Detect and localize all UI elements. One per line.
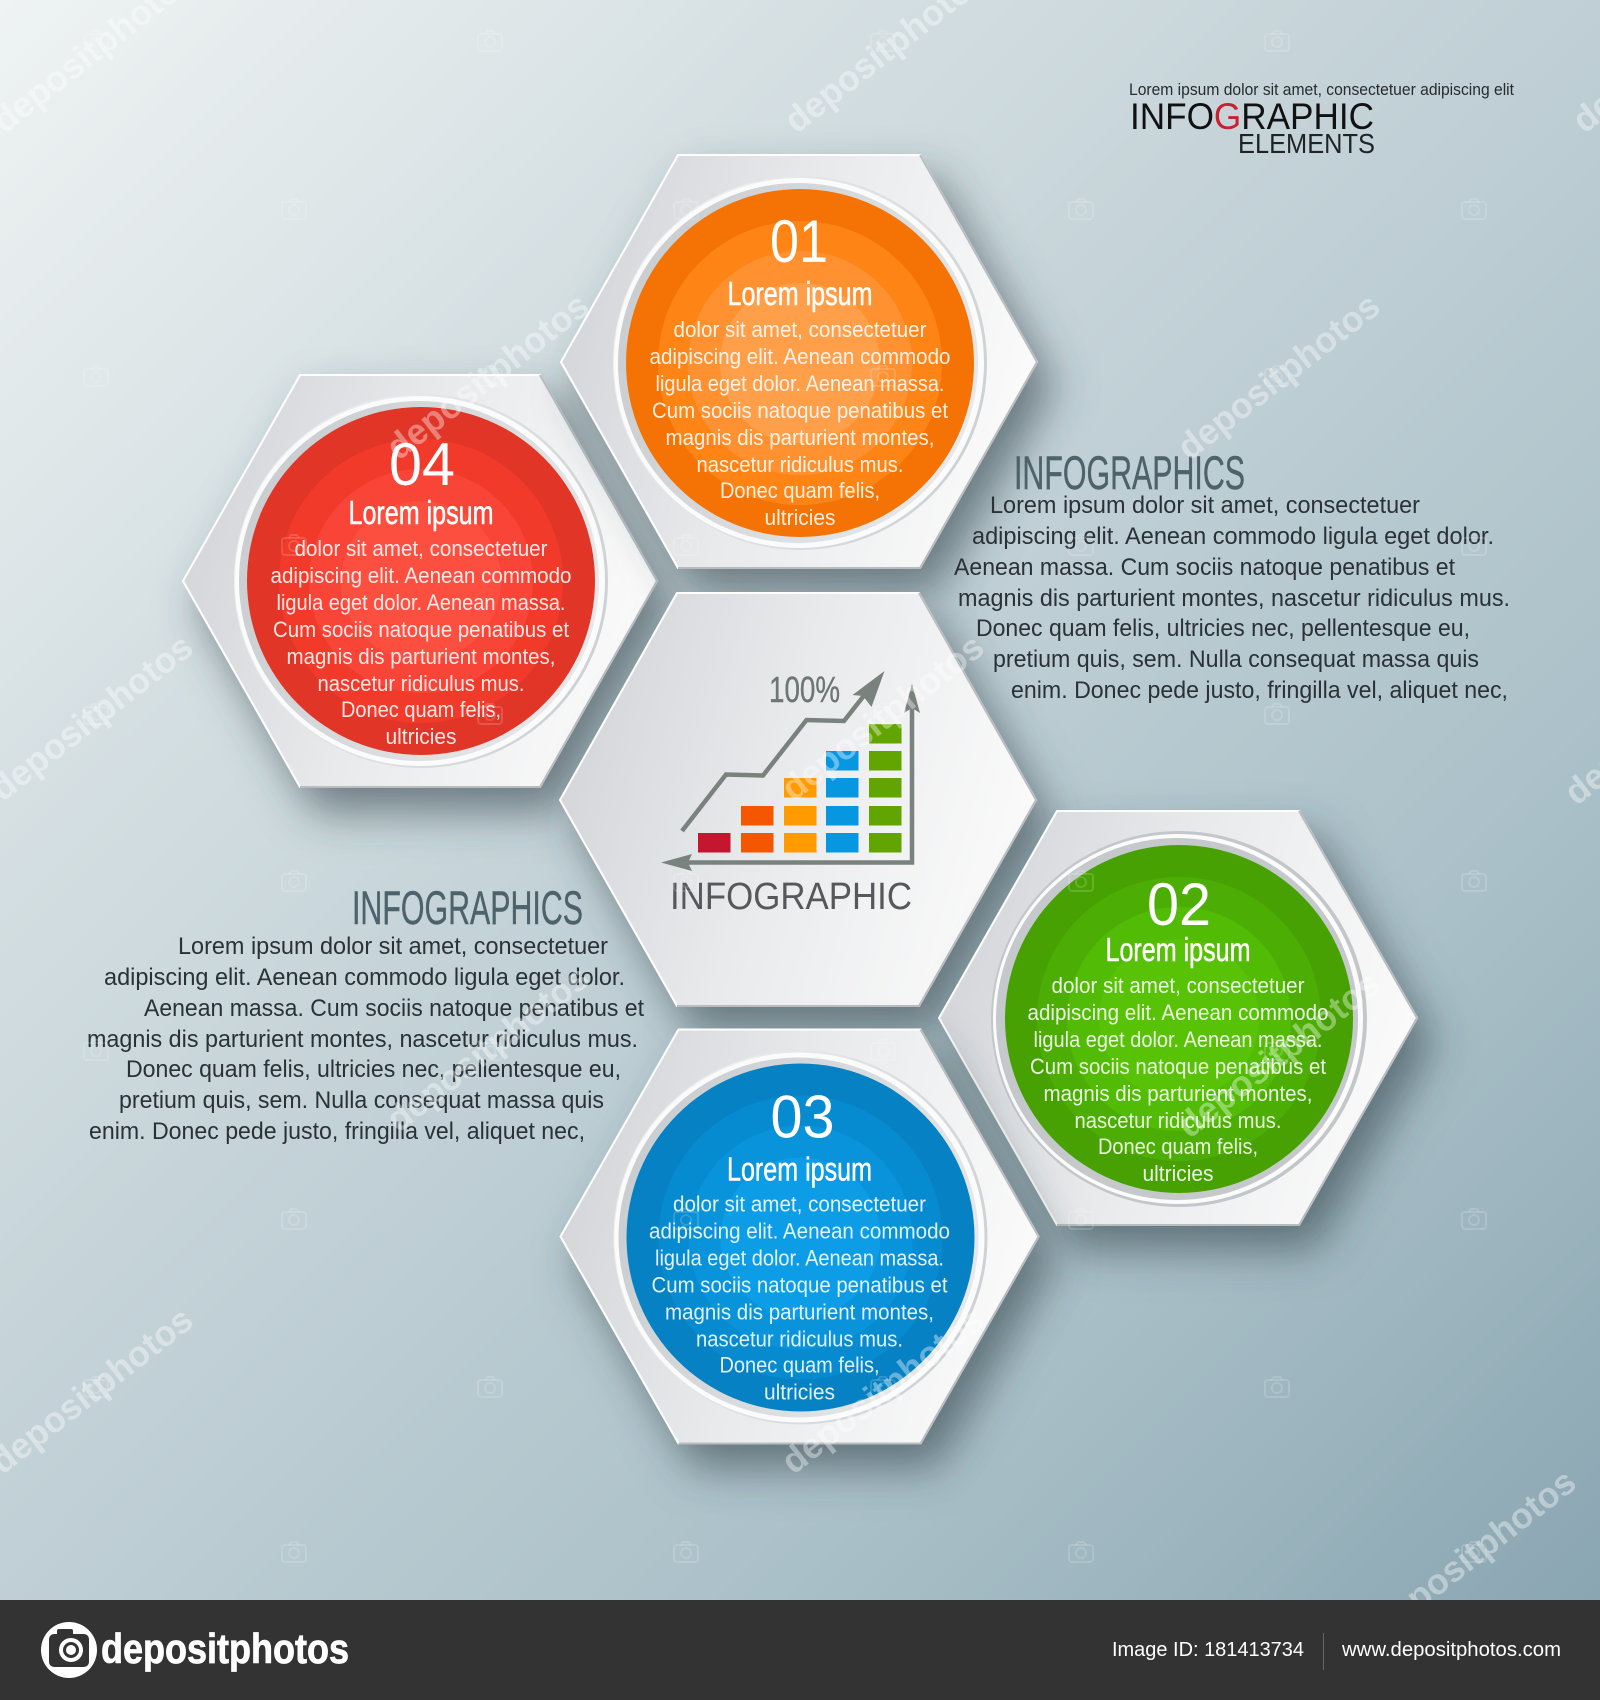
body text: dolor sit amet, consectetuer (294, 536, 548, 561)
body text (649, 1192, 950, 1404)
left paragraph: Lorem ipsum dolor sit amet, consectetuer (178, 933, 608, 960)
body text: Cum sociis natoque penatibus et (652, 1272, 948, 1298)
body text (270, 536, 572, 749)
green disc with concentric rings (1005, 845, 1353, 1193)
watermark: depositphotos text: depositphotos (1169, 963, 1387, 1146)
chart label 100%: 100% (769, 669, 840, 710)
body text: Cum sociis natoque penatibus et (652, 398, 948, 423)
body text: Cum sociis natoque penatibus et (273, 617, 569, 642)
body text: Cum sociis natoque penatibus et (1030, 1054, 1326, 1079)
body text: Donec quam felis, (720, 478, 880, 503)
body text: Donec quam felis, (1098, 1134, 1258, 1159)
left paragraph (87, 933, 644, 1145)
bar column 4 (826, 751, 858, 852)
panel: hexagon 03 blue (560, 1030, 1038, 1444)
watermark: camera icons (84, 31, 1486, 1562)
right paragraph: enim. Donec pede justo, fringilla vel, aliquet nec, (1011, 677, 1508, 704)
right paragraph: magnis dis parturient montes, nascetur ridiculus mus. (958, 585, 1510, 612)
body text (1028, 973, 1328, 1186)
body text: ultricies (764, 505, 836, 530)
left paragraph: Aenean massa. Cum sociis natoque penatibus et (144, 995, 644, 1022)
footer url: www.depositphotos.com (1341, 1639, 1561, 1661)
heading: Lorem ipsum (348, 494, 494, 531)
watermark: depositphotos text: depositphotos (773, 1299, 991, 1482)
panel: hexagon 04 red (183, 375, 657, 787)
orange disc with concentric rings (626, 189, 974, 537)
body text: nascetur ridiculus mus. (1074, 1108, 1282, 1133)
watermark: depositphotos text: depositphotos (378, 957, 596, 1140)
watermark: depositphotos text: depositphotos (1169, 285, 1387, 468)
right paragraph: Aenean massa. Cum sociis natoque penatibus et (954, 554, 1455, 581)
watermark: depositphotos text: depositphotos (1365, 1461, 1583, 1644)
chart axes (661, 684, 920, 871)
watermark: depositphotos text: depositphotos (378, 285, 596, 468)
body text: ligula eget dolor. Aenean massa. (1034, 1027, 1322, 1052)
number 01: 01 (770, 208, 828, 275)
body text: adipiscing elit. Aenean commodo (1028, 1000, 1328, 1025)
icon: growth bar chart (661, 669, 920, 918)
heading: Lorem ipsum (727, 1150, 872, 1188)
heading: Lorem ipsum (1106, 931, 1250, 968)
heading: Lorem ipsum (728, 275, 872, 312)
header title: INFOGRAPHIC (1130, 96, 1374, 137)
body text: Donec quam felis, (720, 1352, 880, 1378)
body text: ligula eget dolor. Aenean massa. (655, 1246, 944, 1270)
bar column 2 (741, 806, 774, 852)
header tagline: Lorem ipsum dolor sit amet, consectetuer adipiscing elit (1129, 80, 1514, 99)
body text: Donec quam felis, (341, 697, 501, 722)
body text: nascetur ridiculus mus. (696, 452, 904, 477)
header subtitle: ELEMENTS (1238, 128, 1375, 159)
body text (650, 317, 950, 530)
footer logo wordmark: depositphotos (101, 1625, 349, 1672)
body text: ligula eget dolor. Aenean massa. (276, 590, 566, 615)
header: infographic elements title (1129, 80, 1514, 159)
bar column 1 (698, 833, 730, 852)
blue disc with concentric rings (626, 1064, 974, 1412)
bar column 5 (869, 724, 902, 852)
panel: hexagon center chart (560, 593, 1036, 1006)
body text: magnis dis parturient montes, (666, 425, 934, 450)
body text: adipiscing elit. Aenean commodo (650, 344, 950, 369)
chart label infographic: INFOGRAPHIC (670, 876, 912, 918)
right paragraph (954, 492, 1510, 704)
body text: ultricies (386, 724, 456, 749)
footer bar (0, 1600, 1600, 1700)
body text: dolor sit amet, consectetuer (673, 1192, 926, 1216)
red disc with concentric rings (247, 407, 595, 755)
body text: dolor sit amet, consectetuer (674, 317, 926, 342)
body text: nascetur ridiculus mus. (318, 671, 524, 696)
panel: hexagon 01 orange (561, 155, 1037, 568)
body text: dolor sit amet, consectetuer (1052, 973, 1304, 998)
text block: right (954, 446, 1510, 704)
body text: adipiscing elit. Aenean commodo (649, 1218, 950, 1244)
right paragraph: pretium quis, sem. Nulla consequat massa quis (993, 646, 1479, 673)
left paragraph: magnis dis parturient montes, nascetur ridiculus mus. (87, 1026, 638, 1053)
number 04: 04 (389, 431, 455, 498)
icon: depositphotos camera logo (41, 1622, 97, 1678)
arrow: trend line (682, 671, 884, 831)
body text: ultricies (764, 1380, 835, 1404)
left paragraph: Donec quam felis, ultricies nec, pellentesque eu, (126, 1056, 621, 1083)
number 02: 02 (1147, 871, 1211, 938)
left paragraph: adipiscing elit. Aenean commodo ligula eget dolor. (104, 964, 625, 991)
bar column 3 (784, 778, 816, 852)
body text: magnis dis parturient montes, (286, 644, 556, 669)
right paragraph: Donec quam felis, ultricies nec, pellentesque eu, (976, 615, 1470, 642)
right paragraph: Lorem ipsum dolor sit amet, consectetuer (990, 492, 1420, 519)
body text: nascetur ridiculus mus. (696, 1326, 903, 1352)
footer image id: Image ID: 181413734 (1112, 1639, 1304, 1661)
panel: hexagon 02 green (939, 811, 1417, 1225)
body text: magnis dis parturient montes, (1044, 1081, 1312, 1106)
right paragraph: adipiscing elit. Aenean commodo ligula eget dolor. (972, 523, 1494, 550)
number 03: 03 (770, 1084, 834, 1150)
left heading: INFOGRAPHICS (352, 881, 583, 934)
body text: magnis dis parturient montes, (665, 1300, 934, 1324)
left paragraph: enim. Donec pede justo, fringilla vel, aliquet nec, (89, 1118, 585, 1145)
body text: adipiscing elit. Aenean commodo (270, 563, 572, 588)
body text: ligula eget dolor. Aenean massa. (656, 371, 944, 396)
text block: left (87, 881, 644, 1145)
watermark: depositphotos text: depositphotos (773, 626, 991, 809)
right heading: INFOGRAPHICS (1014, 446, 1245, 499)
left paragraph: pretium quis, sem. Nulla consequat massa quis (119, 1087, 604, 1114)
body text: ultricies (1142, 1161, 1214, 1186)
